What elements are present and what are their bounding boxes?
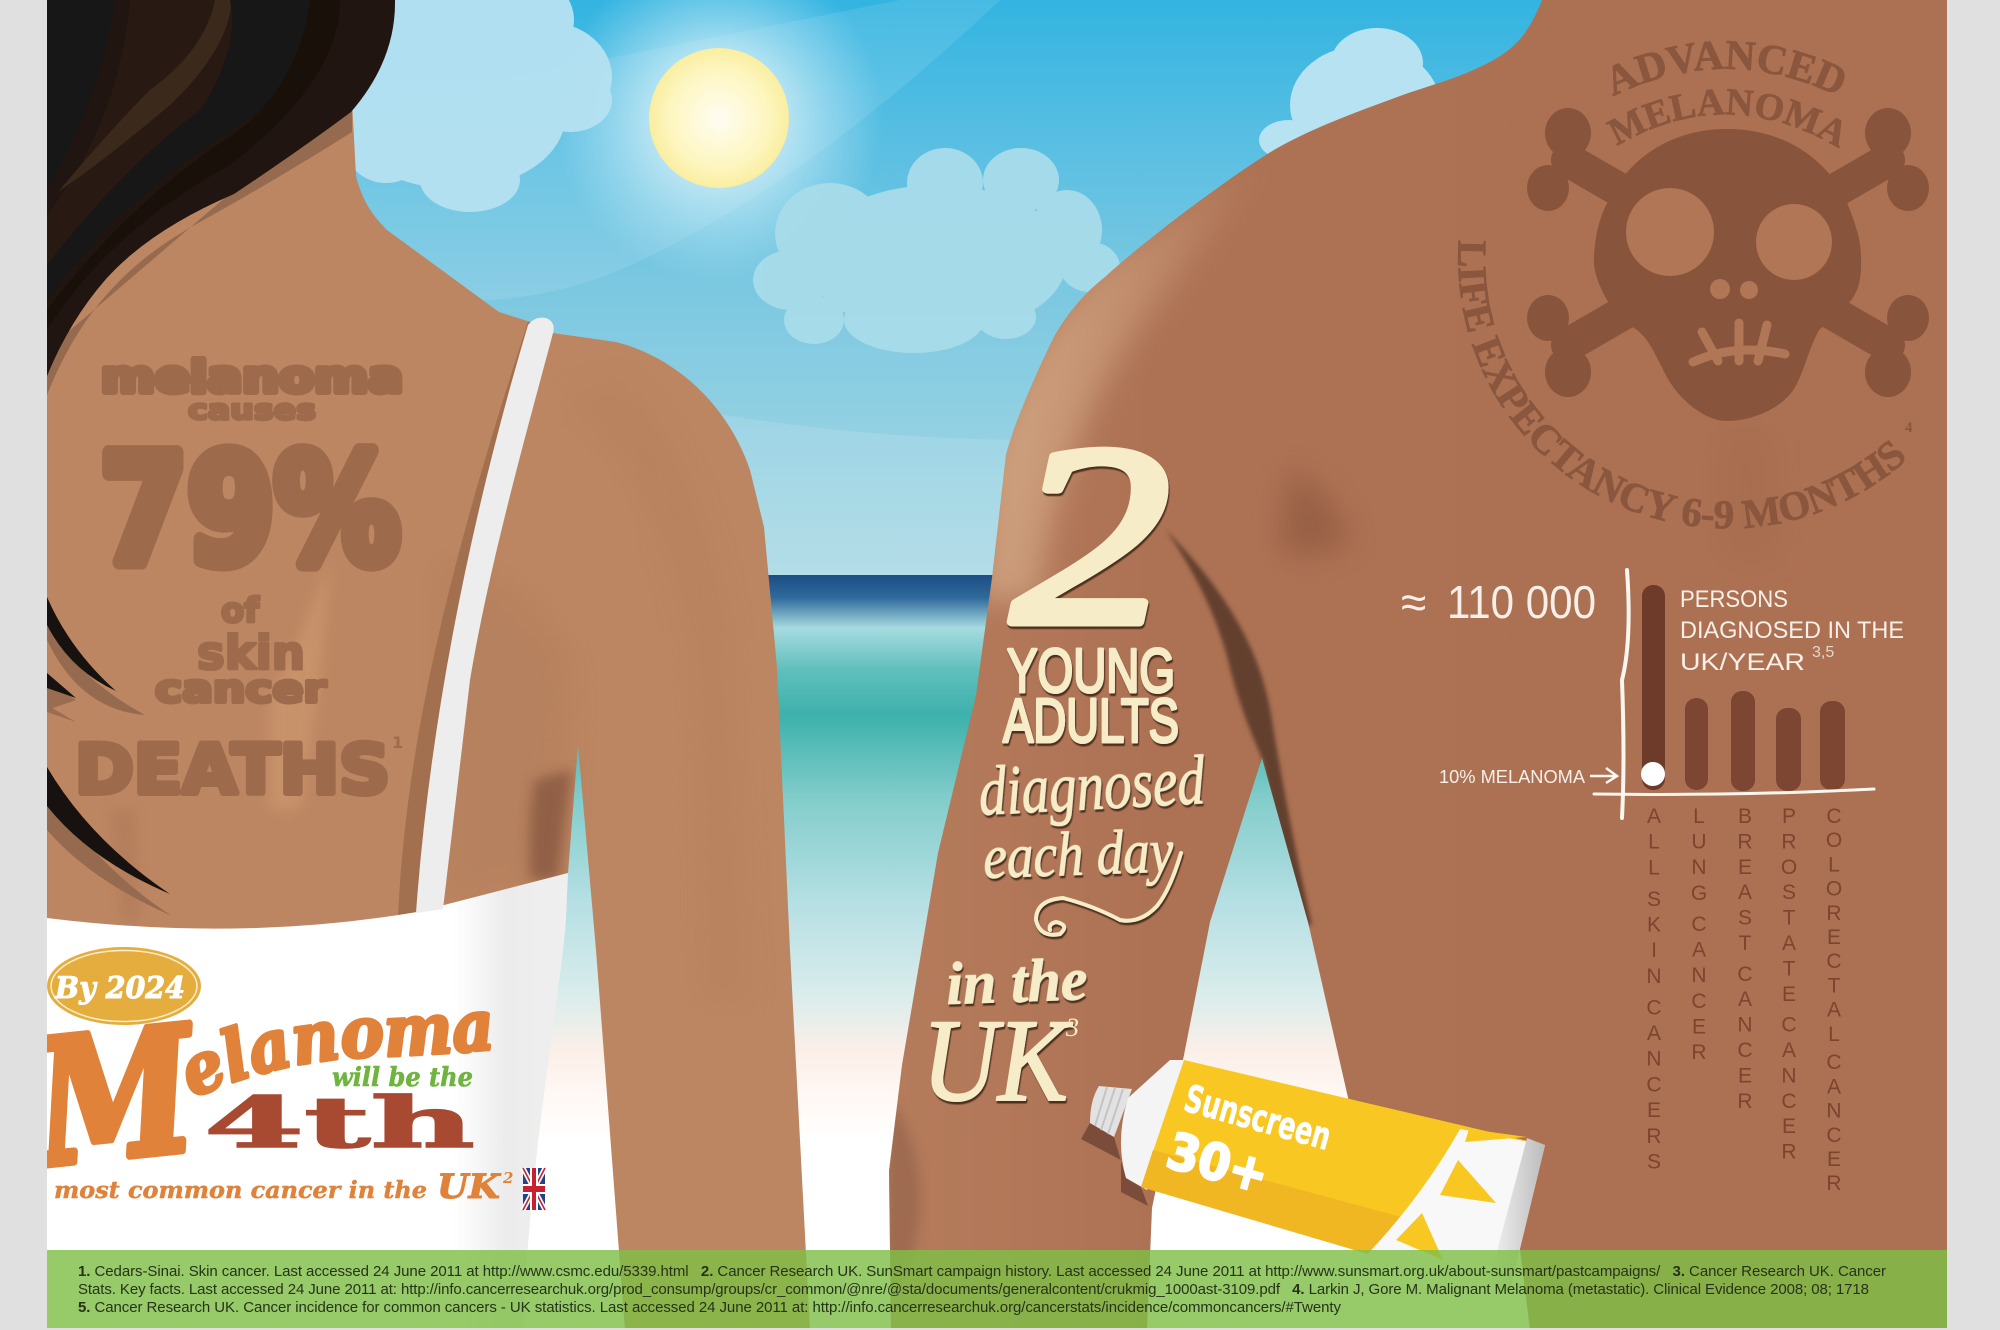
sunscreen lettering: 2 young adults diagnosed each day in the UK: 3 bbox=[1065, 1013, 1079, 1042]
references text: 5. Cancer Research UK. Cancer incidence for common cancers - UK statistics. Last accessed 24 June 2011 at: http://info.cancerresearchuk.org/cancerstats/incidence/commoncancers/#Twenty bbox=[78, 1299, 1342, 1316]
axis labels bbox=[1642, 805, 1846, 1196]
text: persons diagnosed: 3,5 bbox=[1812, 644, 1834, 661]
bar: all skin cancers bbox=[1642, 585, 1665, 790]
references text bbox=[78, 1263, 1886, 1316]
text: melanoma causes 79% of skin cancer deaths: DEATHS bbox=[75, 731, 390, 810]
references text: Stats. Key facts. Last accessed 24 June 2011 at: http://info.cancerresearchuk.org/prod_consump/groups/cr_common/@nre/@sta/documents/generalcontent/crukmig_1000ast-3109.pdf 4. Larkin J, Gore M. Malignant Melanoma (metastatic). Clinical Evidence 2008; 08; 1718 bbox=[78, 1281, 1869, 1298]
text: persons diagnosed: PERSONS bbox=[1680, 586, 1788, 613]
sky background bbox=[356, 0, 1542, 575]
sunscreen lettering: 2 young adults diagnosed each day in the UK: each day bbox=[982, 817, 1175, 892]
hair shadow bbox=[47, 110, 352, 395]
axis labels: BREAST CANCER bbox=[1734, 805, 1756, 1115]
sun bbox=[568, 0, 874, 268]
man figure bbox=[885, 0, 1947, 1330]
sunscreen lettering: 2 young adults diagnosed each day in the UK: UK bbox=[922, 995, 1073, 1126]
text: melanoma causes 79% of skin cancer deaths: cancer bbox=[155, 667, 326, 711]
sunscreen lettering: 2 young adults diagnosed each day in the UK: in the bbox=[945, 946, 1088, 1017]
axis labels: COLORECTAL CANCER bbox=[1822, 805, 1846, 1196]
figure: 110 000: 110 000 bbox=[1447, 576, 1596, 628]
sunscreen lettering: 2 young adults diagnosed each day in the UK: 2 bbox=[1012, 392, 1170, 678]
tube shadow bbox=[1081, 1123, 1148, 1206]
bar chart: persons diagnosed bbox=[1401, 570, 1904, 1196]
curved text: advanced melanoma bbox=[1606, 40, 1845, 148]
strap shadow bbox=[398, 322, 534, 915]
heading: Melanoma bbox=[47, 1011, 492, 1168]
badge: By 2024 bbox=[47, 947, 201, 1025]
cloud: upper right bbox=[1259, 28, 1436, 154]
armpit crease bbox=[1166, 530, 1312, 925]
axis labels: PROSTATE CANCER bbox=[1778, 805, 1800, 1166]
text: melanoma causes 79% of skin cancer deaths: 1 bbox=[392, 733, 403, 752]
text: persons diagnosed: DIAGNOSED IN THE bbox=[1680, 617, 1904, 644]
sunscreen tube bbox=[1081, 1060, 1545, 1290]
bars: other cancers bbox=[1685, 691, 1845, 791]
text: melanoma causes 79% of skin cancer deaths bbox=[75, 352, 403, 810]
sunscreen lettering: 2 young adults diagnosed each day in the UK bbox=[922, 392, 1207, 1126]
sunscreen lettering: 2 young adults diagnosed each day in the UK: YOUNG bbox=[1007, 637, 1175, 706]
curved text: advanced melanoma: MELANOMA bbox=[1606, 88, 1842, 148]
arrow bbox=[1590, 768, 1617, 783]
tube label: Sunscreen 30+: Sunscreen bbox=[1180, 1076, 1336, 1159]
swirl flourish bbox=[1036, 853, 1181, 935]
cloud: upper left bbox=[335, 0, 612, 212]
text: most common cancer in the UK bbox=[55, 1172, 513, 1199]
tube label: Sunscreen 30+ bbox=[1161, 1076, 1336, 1205]
text: melanoma causes 79% of skin cancer deaths: melanoma bbox=[101, 352, 403, 403]
crossbones bbox=[1527, 108, 1929, 397]
tube cap bbox=[1090, 1086, 1132, 1137]
text: most common cancer in the UK: most common cancer in the bbox=[54, 1177, 427, 1204]
text: persons diagnosed: UK/YEAR bbox=[1680, 649, 1805, 676]
sea and beach bbox=[528, 575, 1354, 1250]
text: most common cancer in the UK: UK bbox=[437, 1167, 502, 1207]
lower hair strands bbox=[47, 597, 172, 916]
skull eyes bbox=[1626, 188, 1832, 299]
strap bbox=[416, 318, 554, 913]
text: will be the: will be the bbox=[332, 1063, 473, 1093]
tube body bbox=[1141, 1060, 1545, 1290]
heading: Melanoma: M bbox=[21, 987, 207, 1206]
curved text: life expectancy: 4 bbox=[1905, 420, 1913, 436]
skull and crossbones bbox=[1527, 108, 1929, 421]
text: melanoma causes 79% of skin cancer deaths: of bbox=[221, 591, 260, 631]
marker: 10% melanoma bbox=[1641, 762, 1665, 786]
curved text: life expectancy: LIFE EXPECTANCY 6-9 MONTHS bbox=[1458, 240, 1904, 529]
heading: Melanoma: elanoma bbox=[186, 1011, 492, 1096]
references text: 1. Cedars-Sinai. Skin cancer. Last accessed 24 June 2011 at http://www.csmc.edu/5339.html 2. Cancer Research UK. SunSmart campaign history. Last accessed 24 June 2011 at http://www.sunsmart.org.uk/about-sunsmart/pastcampaigns/ 3. Cancer Research UK. Cancer bbox=[78, 1263, 1886, 1280]
curved text: advanced melanoma: ADVANCED bbox=[1612, 40, 1845, 96]
text: melanoma causes 79% of skin cancer deaths: causes bbox=[188, 393, 316, 426]
man skin bbox=[889, 0, 1947, 1330]
woman figure bbox=[47, 0, 810, 1330]
axis labels: ALL SKIN CANCERS bbox=[1642, 805, 1666, 1176]
text: melanoma causes 79% of skin cancer deaths: skin bbox=[197, 626, 305, 680]
text: 4th: 4th bbox=[204, 1081, 475, 1164]
figure: 110 000: ≈ bbox=[1401, 576, 1426, 628]
sunscreen lettering: 2 young adults diagnosed each day in the UK: diagnosed bbox=[977, 742, 1207, 831]
label: 10% melanoma: 10% MELANOMA bbox=[1439, 767, 1585, 787]
icon: union flag bbox=[523, 1168, 545, 1210]
sunscreen lettering: 2 young adults diagnosed each day in the UK: ADULTS bbox=[1003, 687, 1179, 756]
text: persons diagnosed bbox=[1680, 586, 1904, 676]
axes bbox=[1594, 570, 1874, 818]
tube lower shade bbox=[1141, 1150, 1420, 1262]
text: melanoma causes 79% of skin cancer deaths: 79% bbox=[100, 424, 400, 598]
tube triangles bbox=[1396, 1129, 1527, 1260]
tank top bbox=[47, 873, 568, 1250]
cloud: centre bbox=[753, 148, 1120, 353]
text: most common cancer in the UK: 2 bbox=[502, 1169, 513, 1187]
axis labels: LUNG CANCER bbox=[1688, 805, 1710, 1067]
badge: By 2024: By 2024 bbox=[54, 971, 185, 1006]
tube label: Sunscreen 30+: 30+ bbox=[1161, 1122, 1275, 1205]
skull mouth stitches bbox=[1693, 323, 1785, 362]
woman skin bbox=[47, 100, 810, 1330]
skull head bbox=[1594, 129, 1861, 421]
footer references bar bbox=[47, 1250, 1947, 1330]
hair bbox=[47, 0, 395, 376]
tube shoulder bbox=[1121, 1060, 1190, 1190]
tube crimp end bbox=[1360, 1129, 1545, 1290]
